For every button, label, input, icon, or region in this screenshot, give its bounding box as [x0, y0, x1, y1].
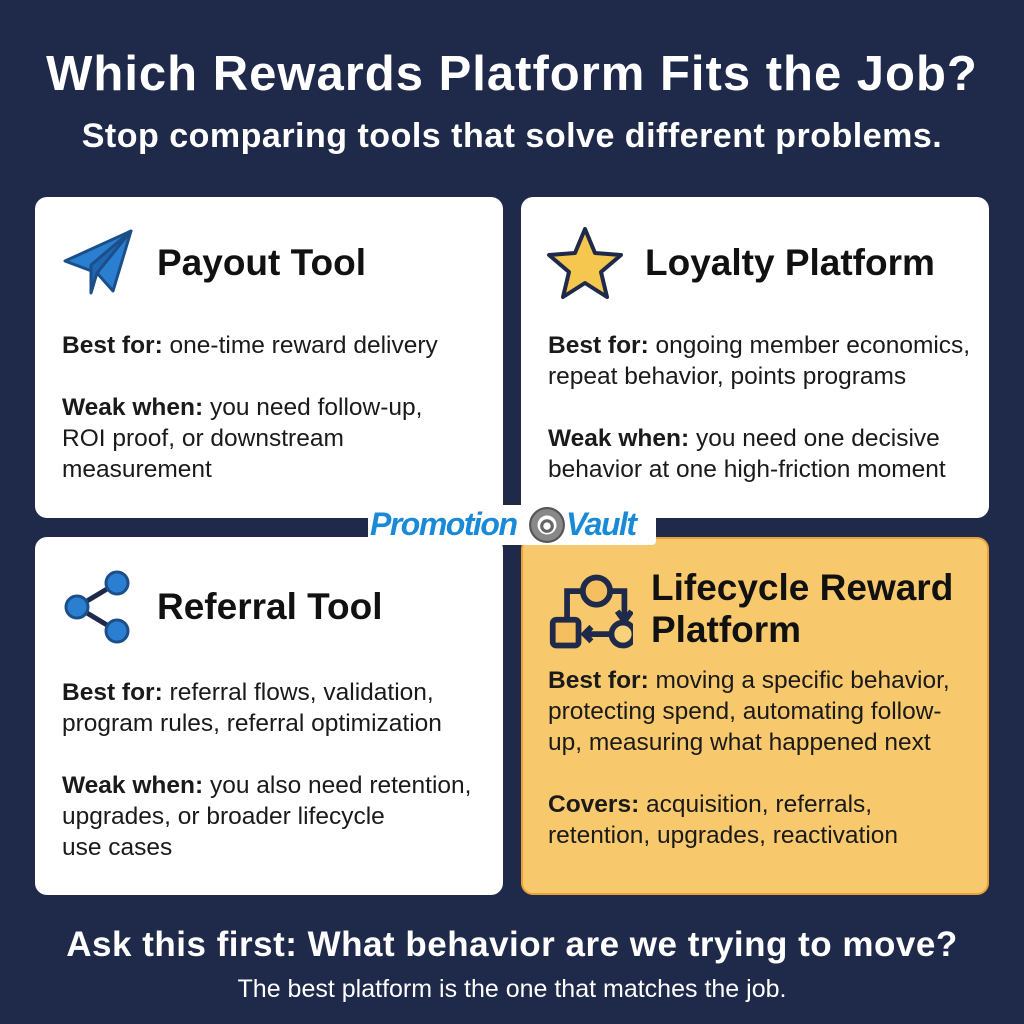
text: behavior at one high-friction moment: [548, 456, 946, 483]
icon: vault dial: [529, 507, 565, 543]
heading: Loyalty Platform: [645, 242, 935, 283]
icon: cycle: [550, 574, 633, 648]
heading: [651, 567, 953, 650]
bottom heading: Ask this first: What behavior are we trying to move?: [66, 925, 958, 964]
subtitle: Stop comparing tools that solve different problems.: [82, 117, 942, 155]
panel: payout tool: [35, 197, 503, 518]
text: retention, upgrades, reactivation: [548, 822, 898, 849]
logo: Promotion Vault: Vault: [566, 506, 636, 542]
text: repeat behavior, points programs: [548, 363, 906, 390]
panel: loyalty platform: [521, 197, 989, 518]
logo: Promotion Vault: Promotion: [370, 506, 516, 542]
text: [548, 332, 970, 483]
bottom subtext: The best platform is the one that matches the job.: [238, 975, 786, 1003]
icon: paper plane: [64, 230, 133, 294]
text: measurement: [62, 456, 212, 483]
icon: star: [546, 226, 623, 300]
panel: referral tool: [35, 537, 503, 895]
icon: share: [64, 570, 130, 644]
title: Which Rewards Platform Fits the Job?: [46, 47, 978, 101]
text: Best for: one-time reward delivery: [62, 332, 438, 359]
text: Best for: ongoing member economics,: [548, 332, 970, 359]
text: protecting spend, automating follow-: [548, 698, 942, 725]
heading: Referral Tool: [157, 586, 382, 627]
text: Covers: acquisition, referrals,: [548, 791, 872, 818]
text: use cases: [62, 834, 172, 861]
heading: Platform: [651, 609, 801, 650]
text: [62, 332, 438, 483]
logo: Promotion Vault: [368, 505, 656, 545]
heading: Payout Tool: [157, 242, 366, 283]
heading: Lifecycle Reward: [651, 567, 953, 608]
text: up, measuring what happened next: [548, 729, 931, 756]
text: [548, 667, 950, 849]
text: ROI proof, or downstream: [62, 425, 344, 452]
panel: lifecycle reward platform: [521, 537, 989, 895]
text: [62, 679, 471, 861]
text: Best for: moving a specific behavior,: [548, 667, 950, 694]
text: upgrades, or broader lifecycle: [62, 803, 385, 830]
text: program rules, referral optimization: [62, 710, 442, 737]
text: Best for: referral flows, validation,: [62, 679, 434, 706]
text: Weak when: you also need retention,: [62, 772, 471, 799]
text: Weak when: you need follow-up,: [62, 394, 422, 421]
text: Weak when: you need one decisive: [548, 425, 940, 452]
